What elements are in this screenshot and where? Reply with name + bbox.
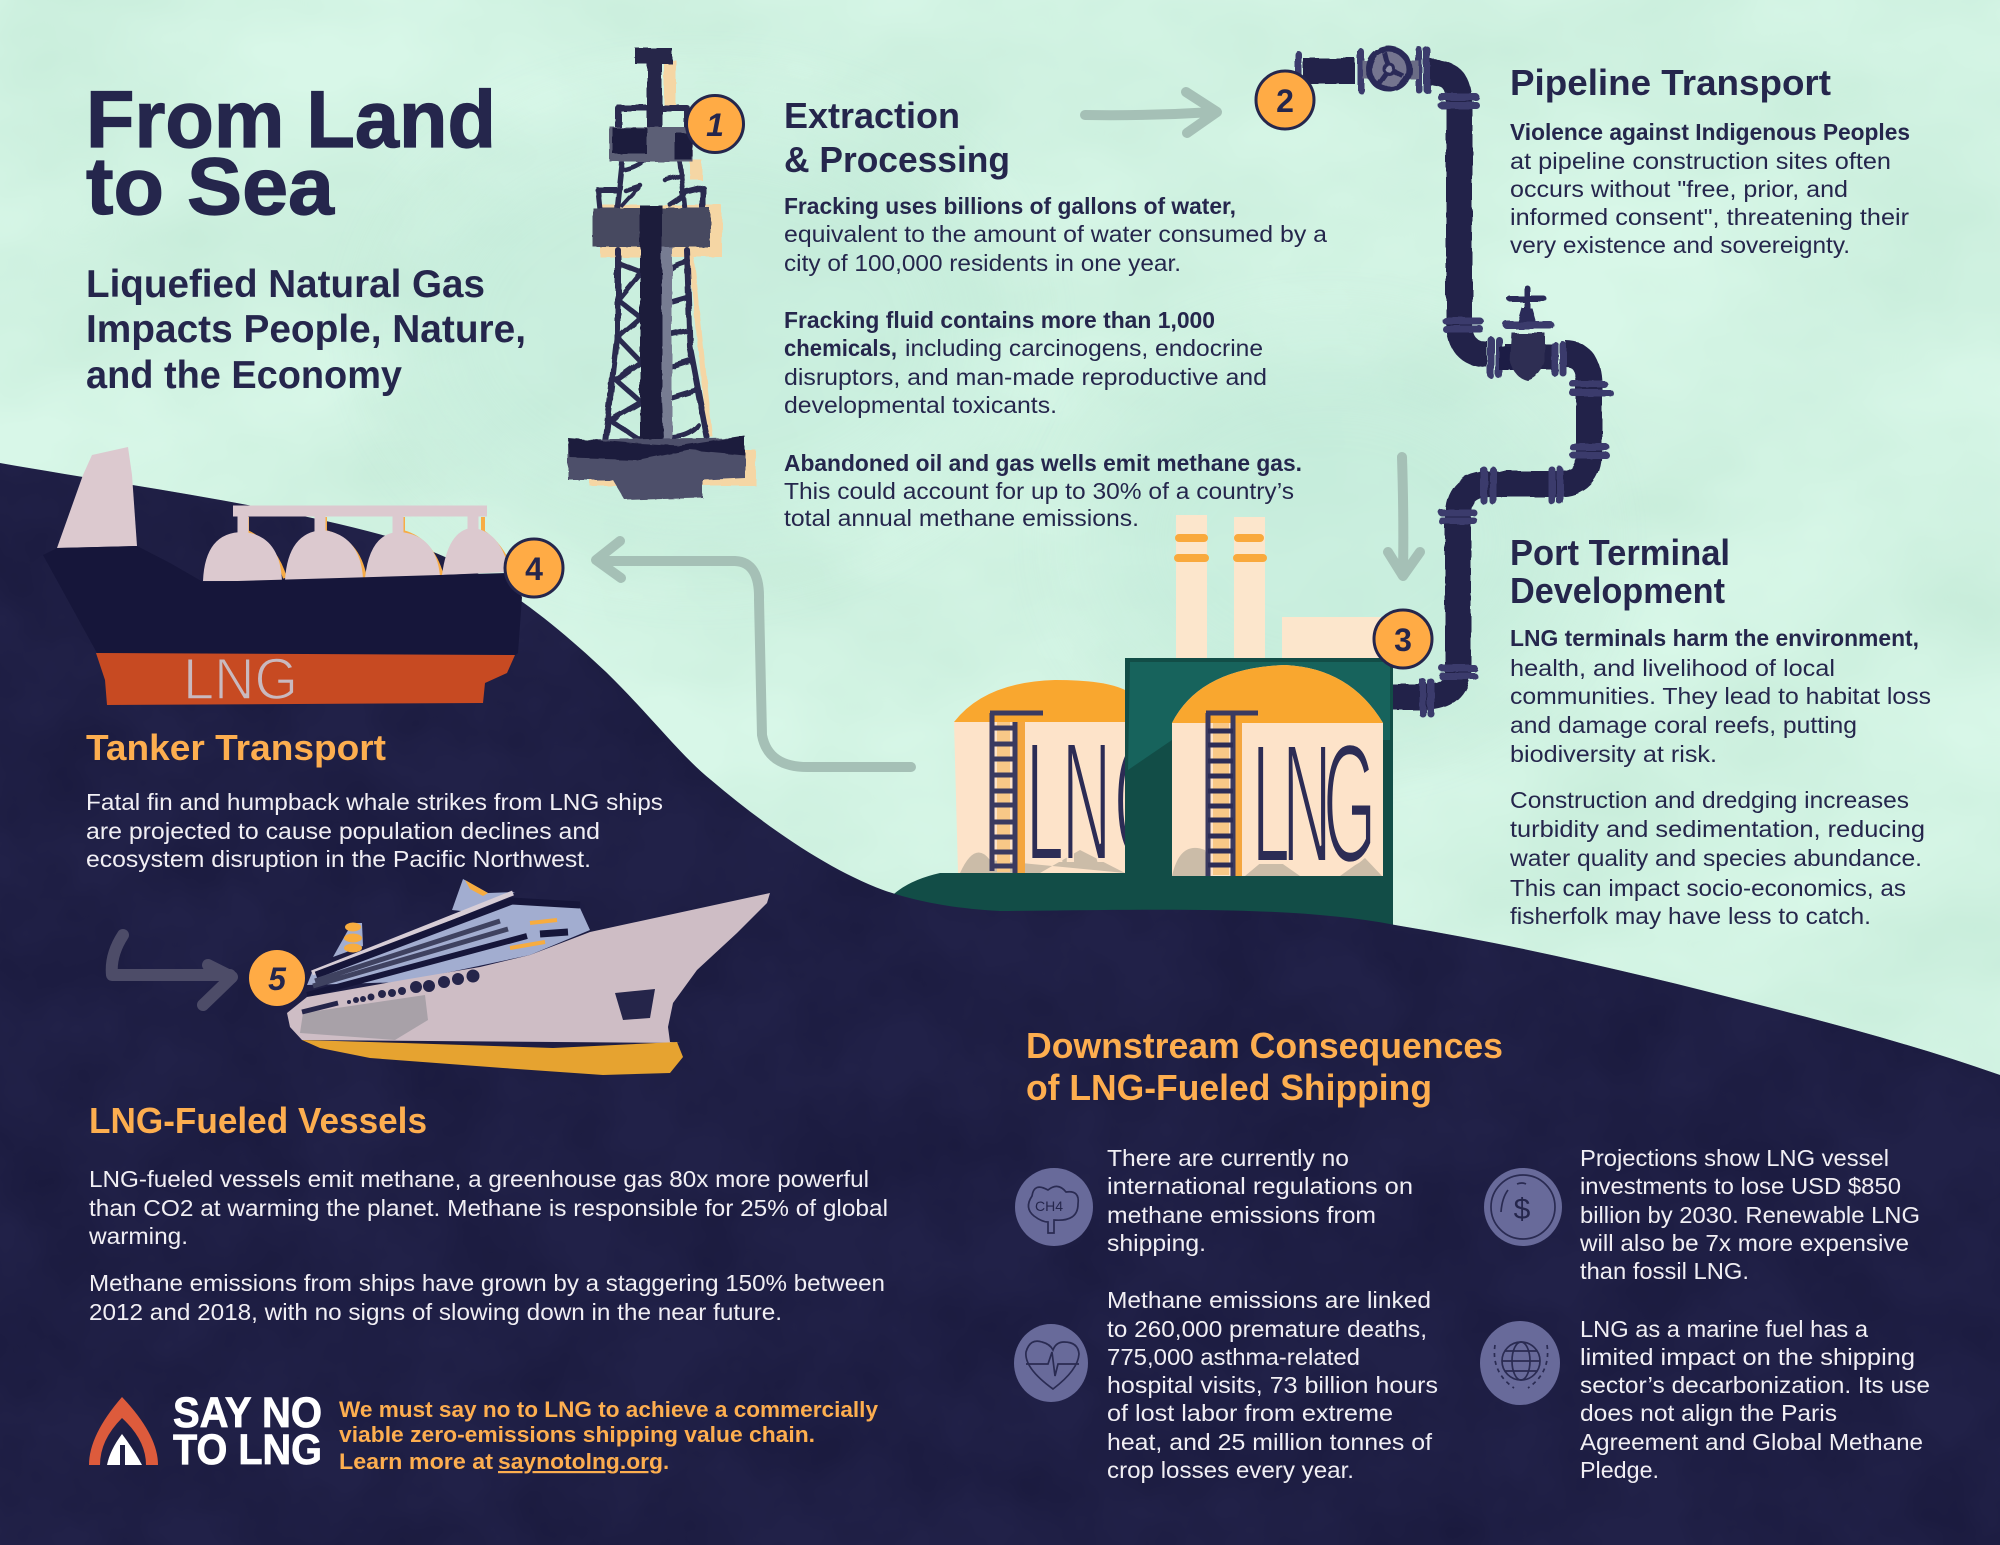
downstream heading: of LNG-Fueled Shipping [1026, 1067, 1432, 1108]
vessels heading: LNG-Fueled Vessels [89, 1100, 427, 1141]
logo flame mark [89, 1397, 158, 1465]
call to action: saynotolng.org [498, 1449, 663, 1474]
icon: heart [1014, 1324, 1088, 1402]
port terminal heading: Development [1510, 570, 1725, 611]
vessel funnel [333, 923, 363, 957]
port terminal illustration [884, 515, 1393, 930]
port terminal text: environment: LNG terminals harm the environment, [1510, 625, 1919, 651]
text: investment losses: than fossil LNG. [1580, 1258, 1749, 1284]
text: no regulations: methane emissions from [1107, 1202, 1376, 1228]
extraction text: chemicals: developmental toxicants. [784, 392, 1057, 418]
text: health impacts: heat, and 25 million tonnes of [1107, 1429, 1433, 1455]
call to action: Learn more at [339, 1449, 494, 1474]
extraction text: water: Fracking uses billions of gallons of water, [784, 193, 1236, 219]
pipeline text: occurs without "free, prior, and [1510, 176, 1848, 202]
downstream heading [1026, 1025, 1503, 1108]
vessels text: methane warming: LNG-fueled vessels emit methane, a greenhouse gas 80x more powerful [89, 1166, 869, 1192]
text: investment losses: Projections show LNG vessel [1580, 1145, 1889, 1171]
step number 1: 1 [706, 107, 724, 143]
port terminal text: environment: health, and livelihood of local [1510, 655, 1835, 681]
tanker gas domes [203, 511, 512, 581]
extraction heading: & Processing [784, 139, 1010, 180]
port terminal heading: Port Terminal [1510, 532, 1730, 573]
extraction heading: Extraction [784, 95, 960, 136]
pipeline text [1510, 119, 1910, 258]
vessel keel [302, 1040, 683, 1075]
extraction text: water [784, 193, 1327, 276]
pipeline heading: Pipeline Transport [1510, 62, 1831, 103]
extraction text: chemicals: including carcinogens, endocrine [905, 335, 1263, 361]
subtitle: Liquefied Natural Gas [86, 263, 485, 306]
extraction text: methane wells: This could account for up to 30% of a country’s [784, 478, 1294, 504]
pipe flanges [1298, 50, 1610, 714]
title: to Sea [86, 142, 335, 232]
subtitle: Impacts People, Nature, [86, 308, 526, 351]
text: health impacts: hospital visits, 73 billion hours [1107, 1372, 1438, 1398]
text: health impacts: 775,000 asthma-related [1107, 1344, 1360, 1370]
logo wordmark: TO LNG [173, 1426, 322, 1474]
tanker text [86, 789, 663, 872]
port terminal text: environment [1510, 625, 1931, 767]
call to action: viable zero-emissions shipping value chain. [339, 1422, 815, 1447]
port terminal heading [1510, 532, 1730, 611]
right LNG tank [1172, 665, 1383, 899]
text: no regulations: international regulations on [1107, 1173, 1413, 1199]
text: limited decarbonization: Agreement and Global Methane [1580, 1429, 1923, 1455]
icon: dollar coin [1484, 1168, 1562, 1246]
green block highlight [1128, 662, 1390, 770]
vessels text: emissions growth [89, 1270, 885, 1325]
pipeline text: informed consent", threatening their [1510, 204, 1909, 230]
panel: LNG-fueled vessels [88, 1100, 888, 1325]
step number 2: 2 [1276, 83, 1294, 119]
port terminal text: dredging: turbidity and sedimentation, reducing [1510, 816, 1925, 842]
tanker text: Fatal fin and humpback whale strikes from LNG ships [86, 789, 663, 815]
panel: downstream consequences [1014, 1025, 1930, 1483]
port terminal text: dredging: Construction and dredging increases [1510, 787, 1909, 813]
tanker ship illustration [43, 447, 522, 712]
gas derrick illustration [568, 48, 756, 500]
port terminal text: dredging: This can impact socio-economics, as [1510, 875, 1906, 901]
vessel mast [452, 879, 515, 912]
panel: port terminal development [1509, 532, 1931, 929]
cruise vessel illustration [287, 879, 770, 1075]
text: no regulations: There are currently no [1107, 1145, 1349, 1171]
derrick orange shadow [590, 60, 756, 486]
port terminal text: environment: communities. They lead to habitat loss [1510, 683, 1931, 709]
tanker funnel [57, 447, 137, 548]
text: health impacts: of lost labor from extreme [1107, 1400, 1393, 1426]
arrow: pipeline to terminal [1388, 457, 1420, 576]
icon: dollar coin: $ [1514, 1193, 1531, 1226]
pipeline text: Violence against Indigenous Peoples [1510, 119, 1910, 145]
left LNG tank: LNG [1026, 708, 1167, 897]
text: investment losses: investments to lose USD $850 [1580, 1173, 1901, 1199]
text: limited decarbonization [1580, 1316, 1930, 1483]
port terminal text: environment: and damage coral reefs, putting [1510, 712, 1857, 738]
arrow: extraction to pipeline [1085, 92, 1217, 133]
tanker text: are projected to cause population declines and [86, 818, 600, 844]
text: no regulations: shipping. [1107, 1230, 1206, 1256]
subtitle: and the Economy [86, 354, 402, 397]
panel: extraction and processing [784, 95, 1327, 531]
vessels text: methane warming [88, 1166, 888, 1249]
logo: say no to LNG [89, 1389, 322, 1474]
text: health impacts: to 260,000 premature deaths, [1107, 1316, 1427, 1342]
pipe run [1303, 71, 1589, 697]
step number 5 [249, 950, 305, 1006]
tanker heading: Tanker Transport [86, 727, 386, 768]
port terminal text: dredging: water quality and species abundance. [1509, 845, 1922, 871]
extraction text: water: city of 100,000 residents in one year. [784, 250, 1181, 276]
extraction text: methane wells [784, 450, 1302, 531]
port terminal text: environment: biodiversity at risk. [1510, 741, 1717, 767]
panel: tanker transport [86, 727, 663, 872]
text: limited decarbonization: Pledge. [1580, 1457, 1659, 1483]
extraction heading [784, 95, 1010, 180]
vessel anchor hole [615, 989, 655, 1020]
step number 1 [686, 96, 744, 152]
dark sea hill [0, 463, 2000, 1545]
text: investment losses [1579, 1145, 1920, 1284]
pipeline text: very existence and sovereignty. [1510, 232, 1850, 258]
text: investment losses: billion by 2030. Renewable LNG [1580, 1202, 1920, 1228]
step number 2 [1256, 71, 1314, 129]
green base [884, 658, 1393, 930]
right LNG tank: LNG [1252, 710, 1376, 899]
top gate valve wheel [1363, 46, 1419, 92]
derrick mast and platforms [635, 48, 672, 130]
downstream heading: Downstream Consequences [1026, 1025, 1503, 1066]
vessels text: methane warming: than CO2 at warming the planet. Methane is responsible for 25% of global [89, 1195, 888, 1221]
step number 3 [1374, 610, 1432, 668]
derrick lattice [598, 108, 707, 443]
extraction text: chemicals: chemicals, [784, 335, 897, 361]
icon: globe with laurels [1480, 1321, 1560, 1405]
vessel portholes [302, 970, 480, 1012]
vessels text: emissions growth: 2012 and 2018, with no signs of slowing down in the near future. [89, 1299, 782, 1325]
logo wordmark: SAY NO [173, 1389, 322, 1437]
call to action: . [663, 1449, 669, 1474]
call to action: We must say no to LNG to achieve a commercially [339, 1397, 879, 1422]
vessels text: emissions growth: Methane emissions from ships have grown by a staggering 150% between [89, 1270, 885, 1296]
panel: pipeline transport [1510, 62, 1910, 258]
left LNG tank [954, 680, 1125, 873]
tanker hull [43, 546, 522, 657]
subtitle [86, 263, 526, 397]
text: health impacts: crop losses every year. [1107, 1457, 1354, 1483]
text: limited decarbonization: does not align the Paris [1580, 1400, 1837, 1426]
tanker text: ecosystem disruption in the Pacific Northwest. [86, 846, 591, 872]
vessel decks [307, 902, 590, 985]
icon: methane cloud [1015, 1168, 1093, 1246]
text: limited decarbonization: limited impact on the shipping [1580, 1344, 1915, 1370]
extraction text: methane wells: Abandoned oil and gas wells emit methane gas. [784, 450, 1302, 476]
extraction text: chemicals: Fracking fluid contains more than 1,000 [784, 307, 1215, 333]
handwheel valve [1499, 288, 1550, 381]
step number 4 [505, 539, 563, 597]
text: no regulations [1107, 1145, 1413, 1256]
icon: methane cloud: CH4 [1035, 1198, 1063, 1214]
text: limited decarbonization: LNG as a marine fuel has a [1580, 1316, 1868, 1342]
chimneys [1176, 515, 1384, 662]
pipeline illustration [1298, 46, 1610, 714]
title: From Land [86, 75, 496, 165]
text: health impacts [1107, 1287, 1438, 1483]
extraction text: chemicals [784, 307, 1267, 418]
tanker LNG lettering: LNG [183, 647, 298, 712]
call to action [339, 1397, 879, 1474]
pipeline text: at pipeline construction sites often [1510, 148, 1891, 174]
port terminal text: dredging [1509, 787, 1925, 929]
vessels text: methane warming: warming. [88, 1223, 188, 1249]
arrow: terminal to tanker [596, 541, 911, 767]
tanker red band [96, 653, 515, 705]
step number 5: 5 [268, 961, 287, 997]
step number 3: 3 [1394, 622, 1412, 658]
text: health impacts: Methane emissions are linked [1107, 1287, 1431, 1313]
step number 4: 4 [525, 551, 543, 587]
text: investment losses: will also be 7x more expensive [1579, 1230, 1909, 1256]
arrow: tanker to vessels [112, 935, 232, 1005]
extraction text: water: equivalent to the amount of water consumed by a [784, 221, 1327, 247]
extraction text: chemicals: disruptors, and man-made reproductive and [784, 364, 1267, 390]
title [86, 75, 496, 232]
port terminal text: dredging: fisherfolk may have less to catch. [1510, 903, 1871, 929]
logo wordmark [173, 1389, 322, 1474]
vessel hull [287, 893, 770, 1043]
text: limited decarbonization: sector’s decarbonization. Its use [1580, 1372, 1930, 1398]
extraction text: methane wells: total annual methane emissions. [784, 505, 1139, 531]
